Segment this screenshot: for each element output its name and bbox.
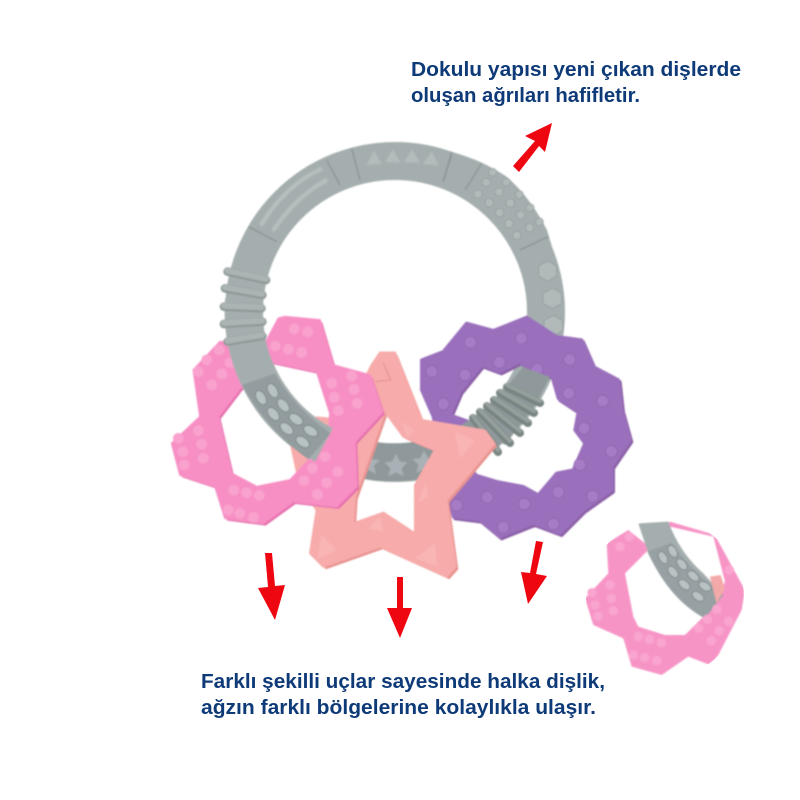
pink hexagon teether: [172, 317, 385, 526]
arrow: down right: [521, 541, 547, 604]
inset salmon accent: [710, 575, 725, 603]
star tip over pink: [372, 353, 413, 408]
purple teether dots: [426, 332, 617, 533]
star triangle bumps: [317, 422, 475, 567]
arrow: down centre: [387, 577, 412, 638]
pink teether dots: [173, 324, 363, 523]
oval bumps: [253, 382, 320, 450]
bottom text: Farklı şekilli uçlar sayesinde halka dişlik,: [201, 671, 605, 693]
ring texture: dots and hexagons: [443, 152, 563, 336]
top text: [411, 59, 741, 107]
ring lower section over purple: [470, 367, 550, 445]
purple wavy teether: [422, 317, 632, 539]
inset ring section: [638, 520, 713, 600]
inset dark section: [647, 543, 723, 618]
arrow: up-right toward top text: [513, 123, 552, 172]
bottom text: ağzın farklı bölgelerine kolaylıkla ulaşır.: [201, 697, 596, 719]
teether toy illustration: [172, 148, 632, 579]
ring ribs lower right: [473, 385, 540, 452]
ring left dark textured section: [242, 373, 331, 459]
inset pink shape: [585, 522, 745, 675]
bottom text: [201, 671, 605, 719]
ring left section over pink: [244, 300, 324, 445]
top text: Dokulu yapısı yeni çıkan dişlerde: [411, 59, 741, 81]
arrow: down left: [258, 553, 285, 620]
top text: oluşan ağrıları hafifletir.: [411, 85, 640, 107]
ring bottom arc: [324, 428, 490, 462]
gray ring base: [244, 161, 546, 463]
ring ribs left: [224, 271, 266, 342]
salmon star teether: [290, 353, 497, 579]
ring texture: grooves and triangles: [248, 148, 452, 242]
inset pink dots: [587, 532, 734, 665]
inset: close-up circle of pink teether: [585, 522, 745, 675]
inset oval bumps: [658, 546, 710, 601]
ring upper right bulge: [443, 152, 565, 323]
ring star decorations: [357, 451, 436, 476]
